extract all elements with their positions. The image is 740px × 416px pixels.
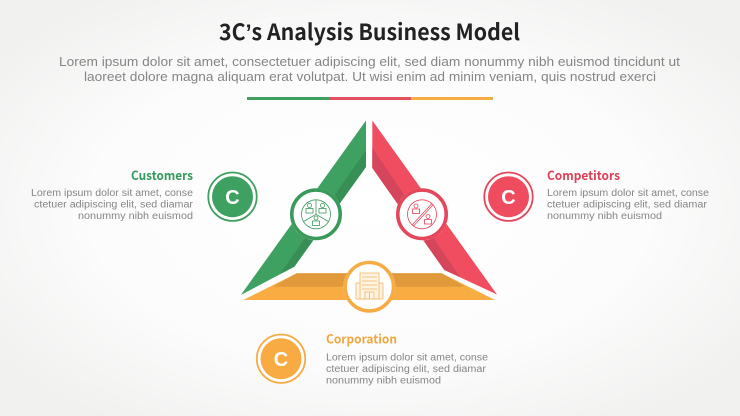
icon: competitors versus [396,188,448,240]
corporation badge: C [274,349,288,371]
subtitle text: laoreet dolore magna aliquam erat volutpat. Ut wisi enim ad minim veniam, quis nostrud exerci [84,70,656,84]
customers text: nonummy nibh euismod [78,211,193,222]
competitors text [547,165,710,222]
subtitle text [59,55,681,84]
customers text: Customers [131,165,193,184]
corporation text: nonummy nibh euismod [326,376,441,386]
customers text: ctetuer adipiscing elit, sed diamar [34,200,194,210]
title: 3C’s Analysis Business Model [219,15,520,47]
icon: corporation building [343,261,395,313]
competitors text: ctetuer adipiscing elit, sed diamar [547,200,708,210]
competitors text: Lorem ipsum dolor sit amet, conse [547,188,710,199]
red competitors blade [372,120,497,294]
customers badge [208,172,257,221]
corporation badge [257,334,305,383]
corporation text: Lorem ipsum dolor sit amet, conse [326,352,489,364]
customers text [31,165,194,222]
competitors text: Competitors [547,165,620,184]
competitors badge: C [501,187,516,209]
triangle diagram [241,120,497,313]
green customers blade [241,120,366,295]
corporation text: ctetuer adipiscing elit, sed diamar [326,364,487,375]
orange corporation blade [243,273,495,300]
subtitle text: Lorem ipsum dolor sit amet, consectetuer adipiscing elit, sed diam nonummy nibh euismod tincidunt ut [59,55,681,69]
customers badge: C [225,187,240,209]
competitors text: nonummy nibh euismod [547,211,662,222]
tricolour divider [247,97,493,100]
customers text: Lorem ipsum dolor sit amet, conse [31,188,194,199]
icon: customers segments [290,188,342,240]
competitors badge [484,172,533,221]
corporation text [326,328,489,386]
corporation text: Corporation [326,328,397,348]
